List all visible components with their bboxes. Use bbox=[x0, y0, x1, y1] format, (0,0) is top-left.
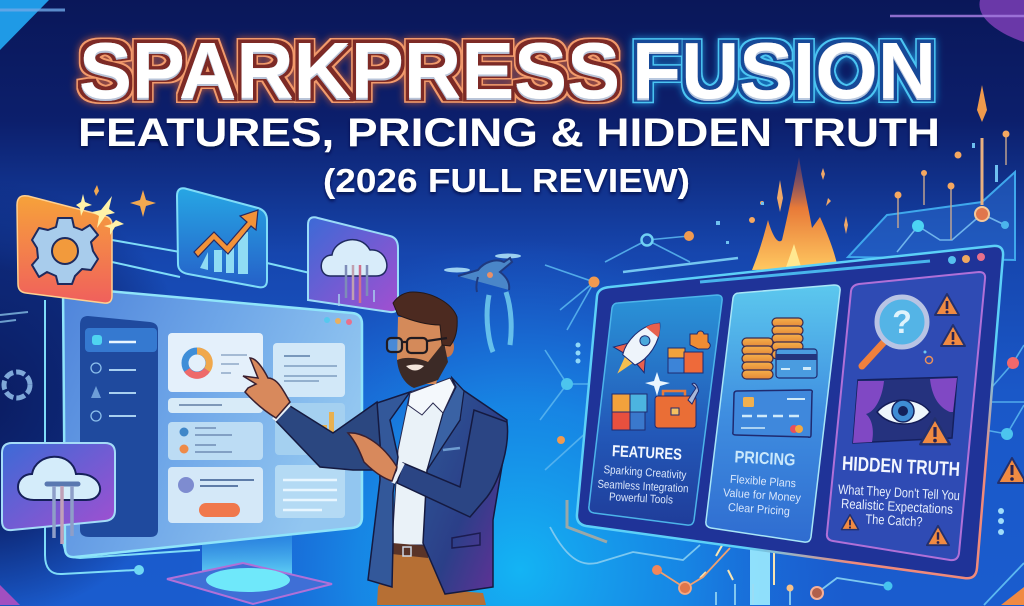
shirt collar bbox=[408, 378, 455, 415]
icon: cloud bbox=[321, 240, 387, 276]
heading: pricing: PRICING bbox=[734, 447, 796, 470]
shirt bbox=[392, 378, 458, 545]
pricing list: Flexible Plans bbox=[730, 474, 796, 490]
title: Fusion: FUSION bbox=[632, 26, 936, 115]
card: profile bbox=[168, 467, 263, 523]
icon: credit card bbox=[733, 390, 812, 437]
card: donut chart bbox=[168, 333, 263, 392]
belt bbox=[392, 543, 428, 558]
icon: cloud bbox=[18, 457, 100, 500]
background cyan glow bbox=[190, 240, 850, 606]
tile: gear bbox=[17, 185, 124, 303]
icon: gear bbox=[32, 218, 98, 284]
connector end dot bbox=[134, 565, 144, 575]
card: text top right bbox=[273, 343, 345, 397]
monitor stand bbox=[167, 530, 332, 604]
card: features bbox=[589, 295, 722, 525]
flame behind panel bbox=[752, 157, 838, 270]
jacket lapel bbox=[427, 378, 464, 470]
bottom-left purple corner bbox=[0, 585, 20, 605]
pricing list: Value for Money bbox=[723, 487, 801, 505]
jacket right front bbox=[423, 378, 507, 594]
title: SparkPress: SPARKPRESS bbox=[79, 26, 620, 115]
review year line: (2026 FULL REVIEW) bbox=[323, 162, 690, 199]
icon: warning outside panel bbox=[998, 458, 1024, 483]
panel frame bbox=[577, 246, 1003, 578]
window dots bbox=[948, 253, 985, 264]
right panel: three cards bbox=[577, 246, 1003, 578]
icon: small card bbox=[776, 349, 817, 378]
background left shade bbox=[0, 180, 200, 606]
icon: warning eye bbox=[920, 418, 950, 444]
sidebar bbox=[80, 316, 158, 537]
small drone left bbox=[0, 312, 28, 322]
hidden truth list bbox=[838, 482, 960, 529]
tile: lower cloud bbox=[2, 443, 115, 544]
drone bbox=[444, 254, 521, 352]
card: pricing bbox=[706, 285, 840, 542]
pointing hand bbox=[243, 358, 290, 418]
card: text lower right bbox=[275, 465, 345, 518]
spark beacons right bbox=[716, 85, 1010, 244]
trousers bbox=[377, 553, 486, 605]
head bbox=[393, 292, 457, 388]
network nodes bbox=[557, 231, 1019, 535]
pointing arm cuff bbox=[274, 404, 289, 420]
jacket pockets bbox=[443, 448, 480, 548]
feature list bbox=[597, 464, 689, 507]
monitor screen bbox=[63, 287, 362, 557]
pricing list: Clear Pricing bbox=[728, 502, 790, 518]
card: list items bbox=[168, 422, 263, 460]
second hand bbox=[348, 433, 397, 481]
card: bar chart bbox=[275, 403, 345, 455]
bottom light beam bbox=[700, 542, 790, 605]
bottom-right corner accent bbox=[984, 563, 1024, 605]
icon: magnifier: ? bbox=[892, 304, 912, 340]
card: hidden truth bbox=[827, 272, 985, 560]
sleeve cuff bbox=[393, 463, 403, 483]
top-left corner accent bbox=[0, 0, 65, 50]
bottom node network bbox=[550, 500, 892, 599]
icon: warning top bbox=[935, 294, 959, 315]
icon: eye with curtains bbox=[853, 377, 957, 443]
icon: growth arrow bbox=[194, 210, 258, 257]
hidden truth list: Realistic Expectations bbox=[841, 496, 953, 517]
icon: cloud cables bbox=[339, 265, 374, 306]
tile: growth chart bbox=[177, 188, 267, 287]
jacket left front bbox=[368, 392, 410, 587]
title bbox=[79, 26, 936, 115]
icon: chart bars bbox=[200, 232, 248, 274]
upper-right chart polygon bbox=[848, 172, 1015, 260]
icon: sparks bbox=[76, 185, 124, 235]
left connector lines bbox=[45, 240, 310, 574]
icon: puzzle bottom bbox=[612, 394, 647, 430]
glasses bbox=[387, 338, 447, 353]
reaching arm bbox=[397, 410, 508, 517]
heading: hidden truth: HIDDEN TRUTH bbox=[841, 453, 960, 481]
feature list: Sparking Creativity bbox=[603, 464, 687, 482]
icon: rocket bbox=[602, 310, 675, 386]
icon: warning small right bbox=[927, 526, 949, 545]
icon: cables bbox=[47, 484, 78, 544]
feature list: Powerful Tools bbox=[609, 491, 673, 507]
top-right corner accent bbox=[890, 0, 1024, 42]
hidden truth list: The Catch? bbox=[865, 512, 923, 529]
monitor bbox=[63, 287, 362, 557]
icon: toolbox bbox=[655, 383, 699, 428]
icon: warning small left bbox=[841, 515, 859, 530]
subtitle: FEATURES, PRICING & HIDDEN TRUTH bbox=[78, 111, 940, 155]
icon: magnifier bbox=[862, 297, 927, 366]
pointing arm bbox=[275, 402, 382, 470]
search bar bbox=[168, 398, 263, 413]
pricing list bbox=[723, 474, 801, 518]
network lines left of panel bbox=[540, 236, 1024, 470]
top highlight bar bbox=[700, 261, 930, 282]
icon: sparkle bbox=[645, 372, 670, 396]
presenter bbox=[243, 292, 508, 605]
segmented ring bbox=[4, 372, 30, 398]
heading: features: FEATURES bbox=[612, 443, 683, 464]
icon: puzzle top bbox=[668, 331, 710, 373]
icon: coin stacks bbox=[742, 318, 803, 379]
tile: cloud bbox=[308, 217, 398, 312]
icon: warning middle bbox=[941, 325, 965, 346]
hidden truth list: What They Don't Tell You bbox=[838, 482, 960, 503]
icon: small dots bbox=[924, 350, 932, 364]
window dots bbox=[324, 317, 352, 325]
icon: star bbox=[130, 190, 156, 217]
feature list: Seamless Integration bbox=[597, 479, 689, 495]
